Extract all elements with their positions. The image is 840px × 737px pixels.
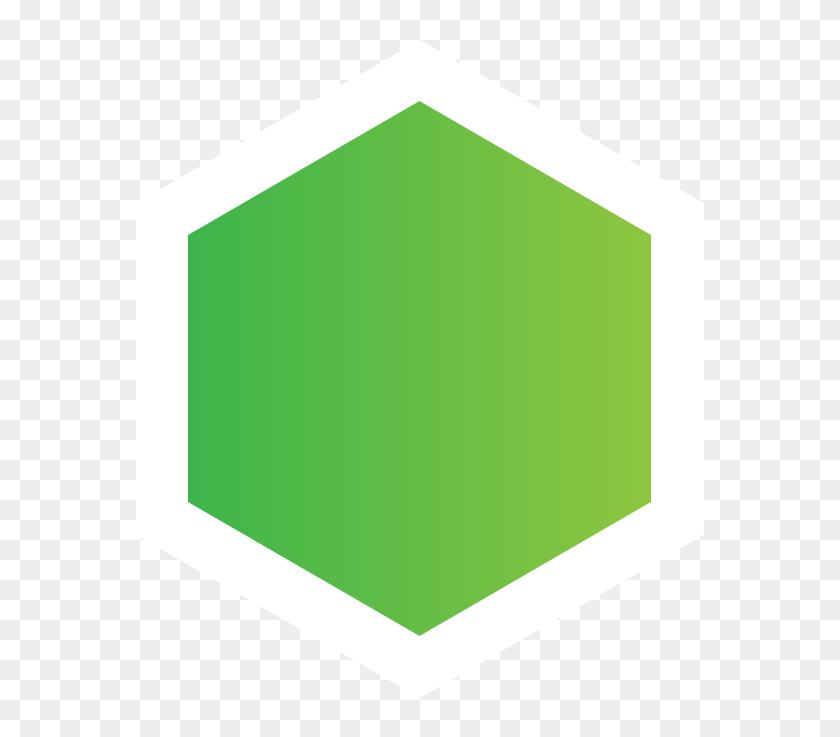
green gradient hexagon <box>188 101 651 636</box>
hexagon icon <box>136 40 704 698</box>
white hexagon border <box>136 40 704 698</box>
